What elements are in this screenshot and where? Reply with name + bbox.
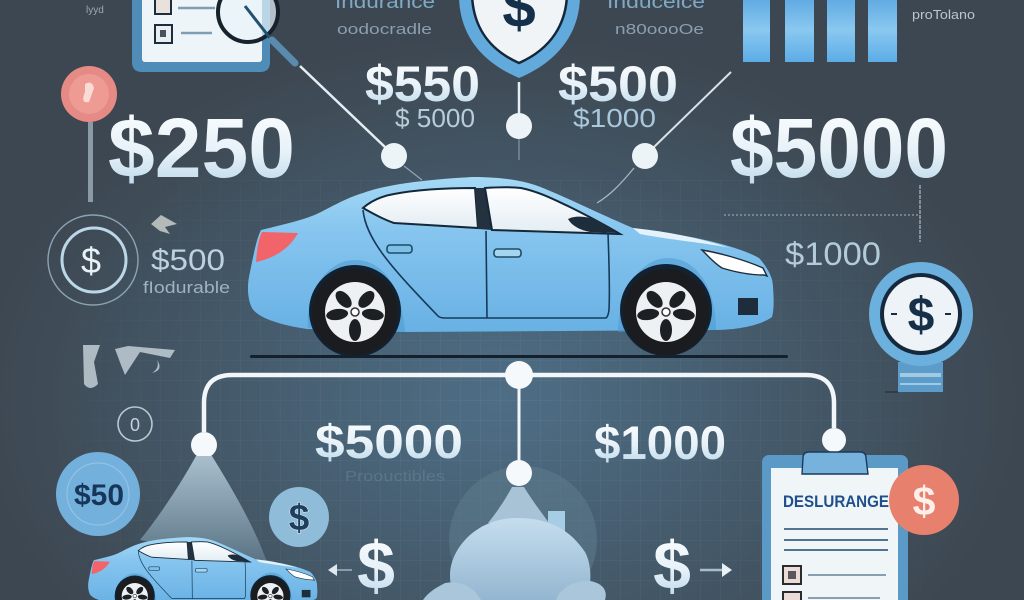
amount: $5000 lower: $5000: [315, 415, 463, 468]
icon: small sparkle: [151, 215, 177, 234]
badge: dollar coin: [269, 487, 329, 547]
label: deductible left: fIodurable: [143, 278, 230, 297]
checklist: [783, 566, 886, 600]
connector tree: [191, 361, 846, 486]
faint sublabel under $5000: Proouctibles: [345, 468, 445, 485]
badge: dollar coin: $: [289, 497, 310, 538]
chart caption: proTolano: [912, 7, 975, 22]
amount: $500: $500: [558, 56, 678, 112]
icon: pink pin: [61, 66, 117, 202]
icon: shield with dollar: [459, 0, 580, 78]
illustration: small car: [88, 537, 317, 600]
connector: clipboard to car: [300, 66, 422, 180]
amount: $550: $550: [365, 56, 480, 112]
clipboard clip: [802, 452, 868, 474]
dotted guide lines: [724, 185, 920, 242]
icon: dollar with right arrow: [653, 528, 732, 600]
amount: $5000 large: $5000: [730, 101, 948, 195]
icon: small round badge: 0: [130, 415, 140, 435]
document heading: DESLURANGE: [783, 492, 889, 511]
document: policy clipboard: [762, 452, 908, 600]
badge: pink dollar: $: [913, 478, 936, 524]
connector: shield to car: [506, 82, 532, 160]
icon: faint top sketch: lyyd: [86, 5, 104, 16]
icon: medal coin: [869, 262, 973, 392]
bar chart: [743, 0, 897, 62]
amount: $1000 lower: $1000: [594, 416, 726, 469]
icon: small round badge: [118, 407, 152, 441]
illustration: main car: [248, 177, 788, 358]
connector: chart to car: [597, 72, 731, 203]
badge: $50: [56, 452, 140, 536]
icon: ringed dollar: $: [81, 240, 101, 281]
badge: pink dollar: [889, 465, 959, 535]
illustration: piggy bank: [423, 466, 606, 600]
title fragment: insurance left: [335, 0, 435, 38]
amount: $5000 small: $ 5000: [395, 103, 475, 133]
icon: medal coin: $: [908, 289, 935, 342]
amount: $1000 right: $1000: [785, 236, 881, 272]
icon: clipboard with magnifier: [132, 0, 295, 72]
title fragment: insurance right: n80oooOe: [615, 21, 704, 38]
icon: ringed dollar: [48, 215, 138, 305]
badge: $50: $50: [74, 479, 124, 512]
amount: $250: $250: [108, 101, 295, 195]
title fragment: insurance left: oodocradle: [337, 21, 432, 38]
icon: dollar with left arrow: [328, 528, 395, 600]
title fragment: insurance right: [607, 0, 705, 38]
amount: $1000 small: $1000: [573, 103, 656, 133]
icon: faded tools sketch: [83, 345, 175, 388]
amount: $500 left: $500: [151, 244, 225, 277]
document text lines: [784, 529, 888, 550]
light beam: [140, 456, 268, 565]
